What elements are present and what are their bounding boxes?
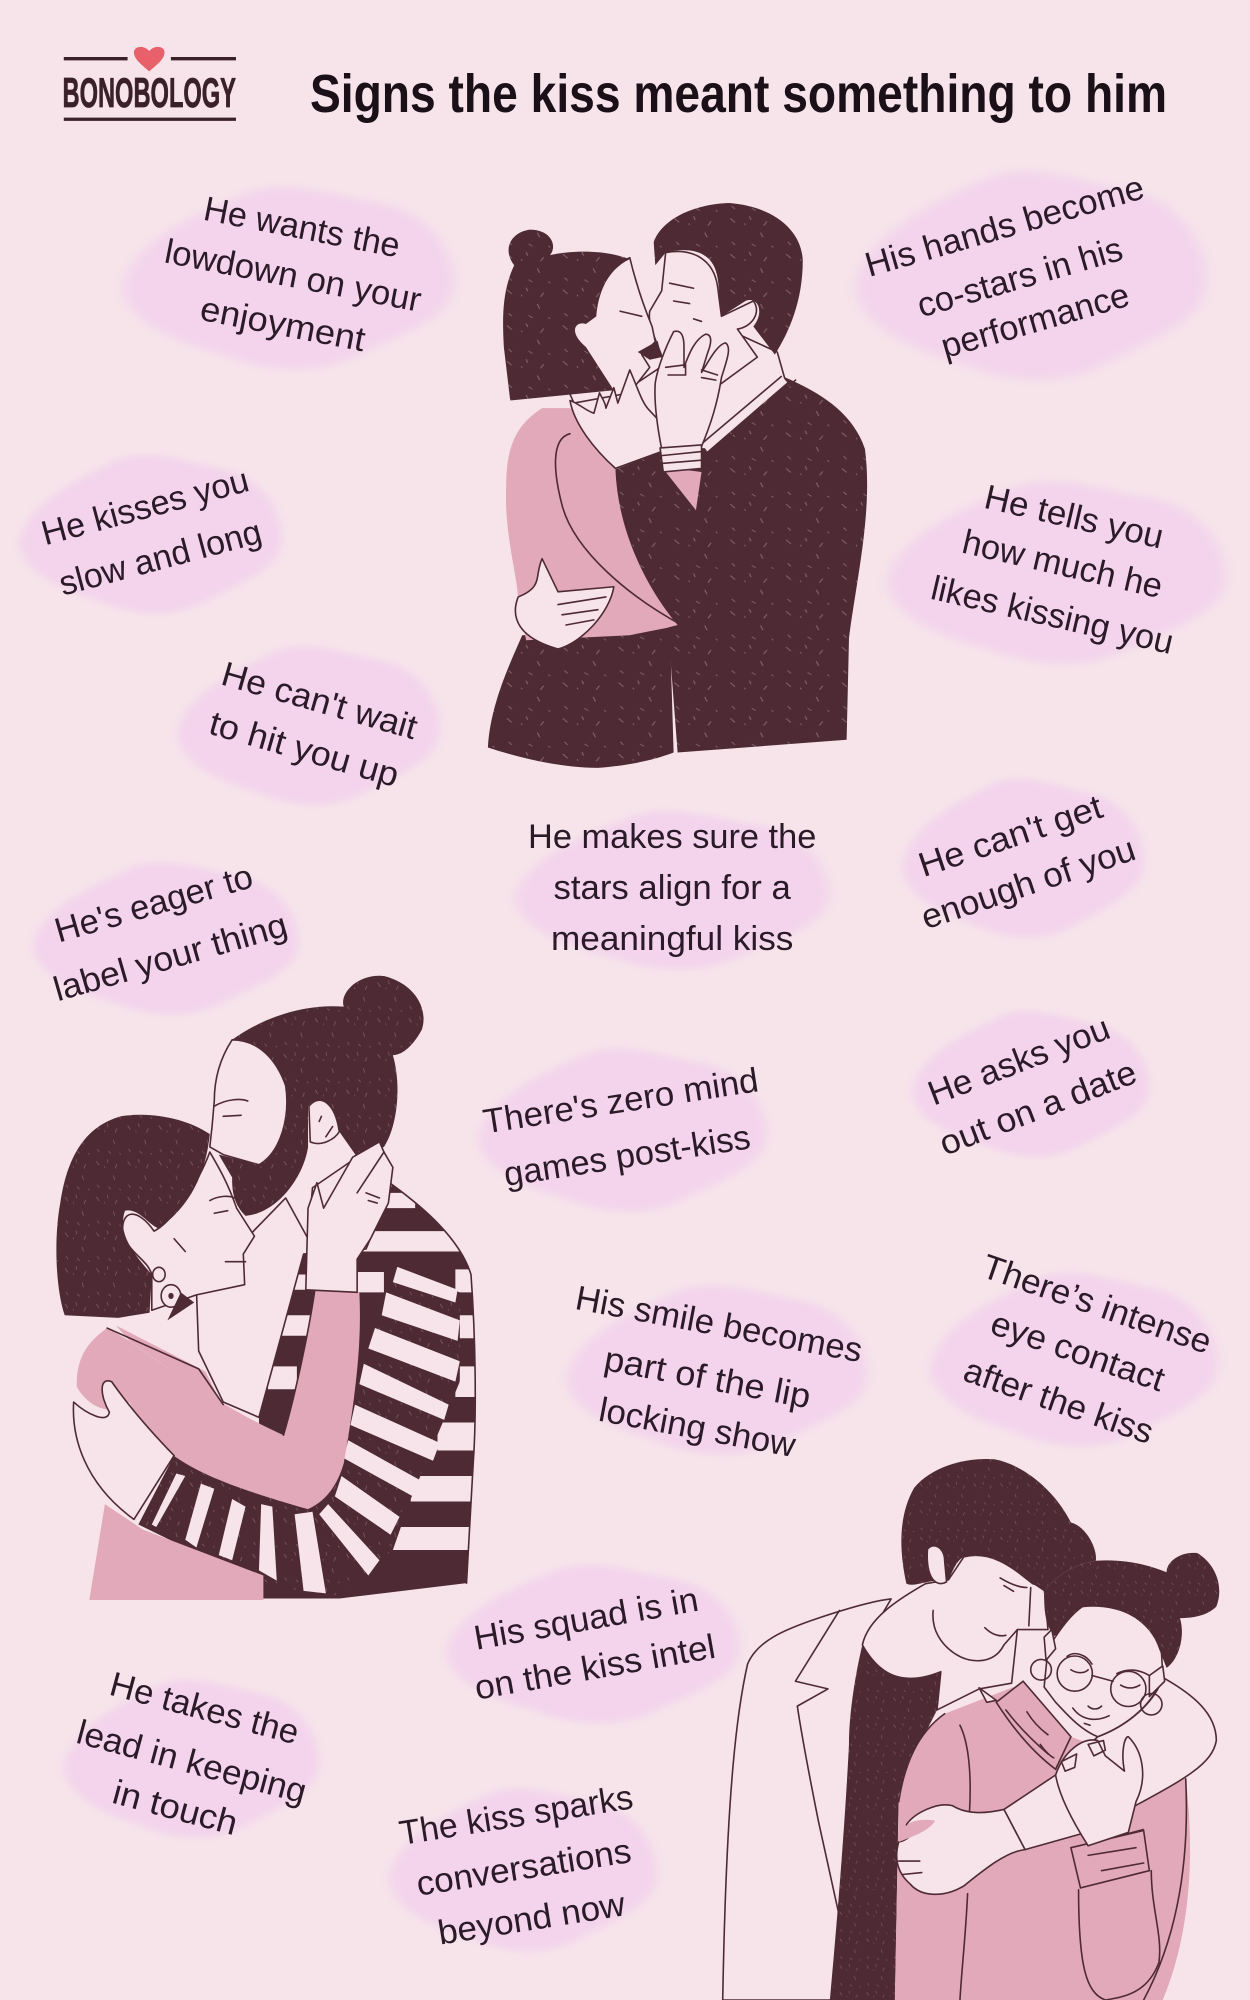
callout: His smile becomes part of the lip locking show: His smile becomes bbox=[572, 1279, 865, 1370]
callout: There's zero mind games post-kiss bbox=[478, 1049, 767, 1211]
callout: He tells you how much he likes kissing you: how much he bbox=[959, 523, 1166, 606]
callout: His smile becomes part of the lip locking show bbox=[566, 1279, 867, 1465]
callout: His squad is in on the kiss intel bbox=[446, 1565, 740, 1723]
callout: He takes the lead in keeping in touch bbox=[64, 1665, 319, 1843]
callout: He takes the lead in keeping in touch: in touch bbox=[109, 1773, 242, 1843]
callout: His squad is in on the kiss intel: on the kiss intel bbox=[472, 1628, 718, 1708]
callout: He's eager to label your thing: He's eager to bbox=[51, 858, 257, 950]
callout: He takes the lead in keeping in touch: He takes the bbox=[106, 1665, 303, 1752]
callout: He can't get enough of you bbox=[902, 779, 1144, 937]
callout: He's eager to label your thing bbox=[33, 858, 298, 1014]
callout: He tells you how much he likes kissing you: likes kissing you bbox=[927, 569, 1177, 662]
callout: There's intense eye contact after the kiss: after the kiss bbox=[959, 1351, 1158, 1452]
callout: He wants the lowdown on your enjoyment: enjoyment bbox=[197, 290, 369, 359]
callout: He makes sure the stars align for a meaningful kiss: stars align for a bbox=[554, 869, 792, 907]
callout: The kiss sparks conversations beyond now bbox=[389, 1778, 657, 1953]
callout: He asks you out on a date: out on a date bbox=[934, 1053, 1142, 1163]
callout: He takes the lead in keeping in touch: lead in keeping bbox=[73, 1713, 311, 1811]
callout: He can't get enough of you: He can't get bbox=[914, 788, 1108, 885]
callout: He makes sure the stars align for a meaningful kiss bbox=[515, 811, 829, 969]
callout: There's intense eye contact after the kiss: eye contact bbox=[986, 1304, 1170, 1399]
callout: There's intense eye contact after the kiss: There’s intense bbox=[977, 1248, 1216, 1362]
callout: He can't wait to hit you up bbox=[177, 647, 440, 805]
logo: Bonobology: BONOBOLOGY bbox=[62, 69, 236, 116]
callout: He kisses you slow and long: He kisses you bbox=[37, 461, 253, 553]
callout: There's intense eye contact after the kiss bbox=[930, 1248, 1218, 1452]
callout: He can't get enough of you: enough of you bbox=[917, 830, 1140, 937]
illustration: couple embracing, man with bun and striped sweater bbox=[56, 976, 482, 1601]
callout: He wants the lowdown on your enjoyment: He wants the bbox=[201, 190, 403, 265]
callout: The kiss sparks conversations beyond now: conversations bbox=[414, 1832, 634, 1904]
callout: He makes sure the stars align for a meaningful kiss: He makes sure the bbox=[528, 818, 816, 856]
callout: He can't wait to hit you up: to hit you up bbox=[205, 704, 403, 795]
callout: There's zero mind games post-kiss: games post-kiss bbox=[501, 1118, 753, 1194]
illustration: couple hugging, woman with glasses bbox=[723, 1459, 1219, 2000]
callout: His hands become co-stars in his performance bbox=[855, 169, 1207, 380]
logo: Bonobology bbox=[62, 47, 236, 119]
callout: The kiss sparks conversations beyond now: The kiss sparks bbox=[397, 1778, 636, 1853]
callout: He tells you how much he likes kissing you: He tells you bbox=[981, 478, 1167, 556]
callout: He kisses you slow and long: slow and long bbox=[55, 513, 266, 604]
callout: There's zero mind games post-kiss: There's zero mind bbox=[480, 1061, 761, 1141]
callout: He tells you how much he likes kissing you bbox=[886, 478, 1226, 664]
callout: His hands become co-stars in his performance: performance bbox=[937, 276, 1134, 366]
callout: The kiss sparks conversations beyond now: beyond now bbox=[435, 1885, 628, 1953]
callout: He asks you out on a date bbox=[912, 1009, 1149, 1163]
callout: His squad is in on the kiss intel: His squad is in bbox=[471, 1581, 701, 1658]
callout: He makes sure the stars align for a meaningful kiss: meaningful kiss bbox=[551, 920, 793, 958]
callout: His hands become co-stars in his performance: co-stars in his bbox=[913, 230, 1127, 325]
illustration: couple kissing, top centre bbox=[488, 203, 867, 768]
callout: He wants the lowdown on your enjoyment: lowdown on your bbox=[162, 233, 424, 320]
callout: His smile becomes part of the lip locking show: part of the lip bbox=[601, 1340, 814, 1416]
callout: He wants the lowdown on your enjoyment bbox=[122, 187, 454, 369]
icon: heart bbox=[134, 47, 165, 71]
callout: His smile becomes part of the lip locking show: locking show bbox=[596, 1391, 799, 1465]
callout: His hands become co-stars in his performance: His hands become bbox=[861, 169, 1148, 285]
callout: He asks you out on a date: He asks you bbox=[923, 1009, 1115, 1113]
callout: He kisses you slow and long bbox=[19, 455, 282, 613]
callout: He can't wait to hit you up: He can't wait bbox=[217, 655, 422, 747]
callout: He's eager to label your thing: label your thing bbox=[49, 906, 292, 1009]
